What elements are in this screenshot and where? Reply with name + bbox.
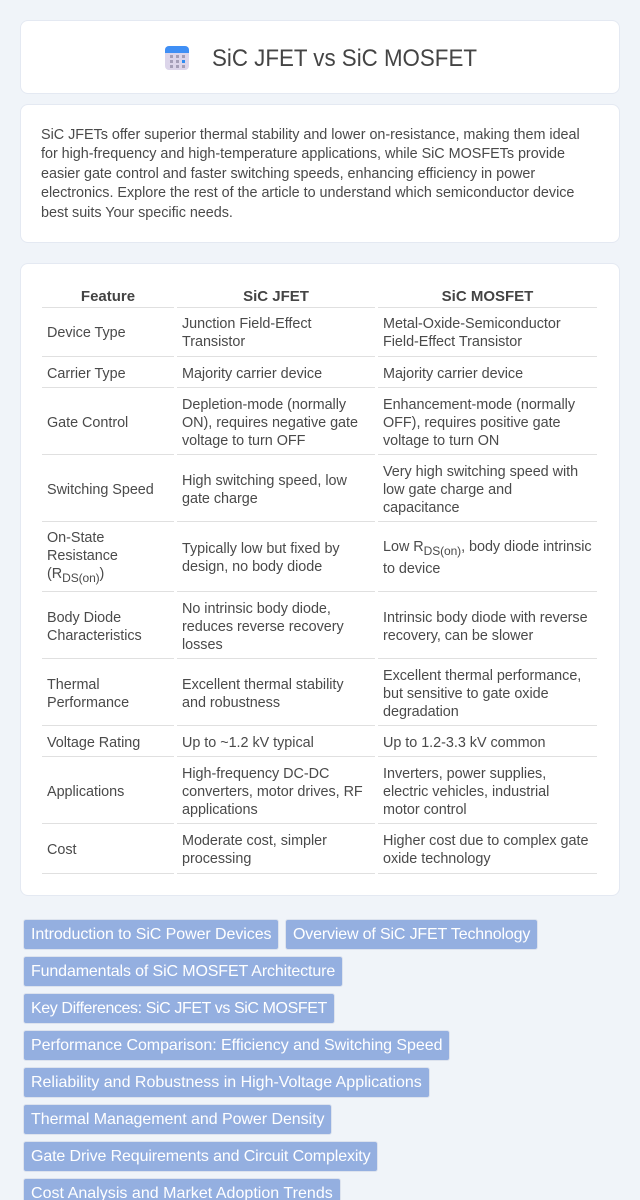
table row: thermal performance: degradation <box>383 704 459 720</box>
tag: gate drive <box>23 1141 378 1172</box>
table row: thermal performance: Excellent thermal performance, <box>383 668 581 684</box>
table row: cost <box>42 833 597 874</box>
table row: body diode characteristics: losses <box>182 636 223 652</box>
table row: on-state resistance: Typically low but fixed by <box>182 541 340 557</box>
table row: on-state resistance: to device <box>383 561 440 577</box>
table row: body diode characteristics <box>42 600 597 659</box>
tag: thermal management: Thermal Management and Power Density <box>31 1111 324 1128</box>
table row: switching speed: gate charge <box>182 490 258 506</box>
table row: cost: Moderate cost, simpler <box>182 833 327 849</box>
text block: introduction: SiC JFETs offer superior thermal stability and lower on-resistance, making them ideal <box>41 127 580 143</box>
text block: introduction: easier gate control and faster switching speeds, enhancing efficiency in power <box>41 166 535 182</box>
table row: device type: Junction Field-Effect <box>182 316 311 332</box>
table header: Feature <box>81 288 135 305</box>
text block: introduction: electronics. Explore the rest of the article to understand which semiconductor device <box>41 185 574 201</box>
table row: gate control: Enhancement-mode (normally <box>383 396 575 412</box>
table row: body diode characteristics: reduces reverse recovery <box>182 618 344 634</box>
tag: performance comparison <box>23 1030 450 1061</box>
table row: switching speed: Switching Speed <box>47 482 154 498</box>
table row: applications: High-frequency DC-DC <box>182 766 329 782</box>
table row: cost: processing <box>182 851 251 867</box>
table row: on-state resistance: On-State <box>47 530 104 546</box>
table row: thermal performance: Performance <box>47 694 129 710</box>
tag: reliability <box>23 1067 430 1098</box>
tag: reliability: Reliability and Robustness in High-Voltage Applications <box>31 1074 422 1091</box>
table row: on-state resistance: (RDS(on)) <box>47 566 104 585</box>
table row: voltage rating: Voltage Rating <box>47 734 140 750</box>
table row: gate control: Gate Control <box>47 414 128 430</box>
tag: thermal management <box>23 1104 332 1135</box>
text block: introduction: for high-frequency and high-temperature applications, while SiC MOSFETs provide <box>41 146 565 162</box>
table row: gate control <box>42 396 597 455</box>
table row: thermal performance: Excellent thermal stability <box>182 676 344 692</box>
table row: thermal performance: Thermal <box>47 676 100 692</box>
panel: comparison table card <box>20 263 620 896</box>
table row: body diode characteristics: Characteristics <box>47 628 142 644</box>
table row: device type <box>42 316 597 357</box>
table row: voltage rating: Up to 1.2-3.3 kV common <box>383 734 545 750</box>
table row: body diode characteristics: No intrinsic body diode, <box>182 600 331 616</box>
table row: gate control: ON), requires negative gate <box>182 414 358 430</box>
table row: applications: electric vehicles, industrial <box>383 784 549 800</box>
table header: SiC JFET <box>243 288 309 305</box>
table row: body diode characteristics: recovery, can be slower <box>383 628 533 644</box>
title: SiC JFET vs SiC MOSFET <box>212 45 477 72</box>
tag: introduction: Introduction to SiC Power Devices <box>31 926 271 943</box>
table row: applications: converters, motor drives, RF <box>182 784 363 800</box>
table row: on-state resistance: Low RDS(on), body diode intrinsic <box>383 539 592 558</box>
table row: gate control: OFF), requires positive gate <box>383 414 561 430</box>
tag: gate drive: Gate Drive Requirements and Circuit Complexity <box>31 1148 370 1165</box>
tag: key differences: Key Differences: SiC JFET vs SiC MOSFET <box>31 1000 327 1017</box>
table row: carrier type <box>42 366 597 388</box>
table row: cost: oxide technology <box>383 851 491 867</box>
tag: SiC MOSFET fundamentals: Fundamentals of SiC MOSFET Architecture <box>31 963 335 980</box>
table row: thermal performance: but sensitive to gate oxide <box>383 686 549 702</box>
table row: gate control: voltage to turn ON <box>383 432 499 448</box>
table row: carrier type: Carrier Type <box>47 366 126 382</box>
table row: on-state resistance: design, no body diode <box>182 559 322 575</box>
table row: cost: Cost <box>47 842 76 858</box>
table row: switching speed: capacitance <box>383 500 459 516</box>
table row: device type: Metal-Oxide-Semiconductor <box>383 316 561 332</box>
table row: on-state resistance: Resistance <box>47 548 118 564</box>
text block: introduction: best suits Your specific needs. <box>41 205 233 221</box>
table row: device type: Transistor <box>182 334 245 350</box>
tag: introduction <box>23 919 279 950</box>
table row: gate control: voltage to turn OFF <box>182 432 305 448</box>
tag: key differences <box>23 993 335 1024</box>
table row: body diode characteristics: Body Diode <box>47 610 121 626</box>
table row: switching speed: low gate charge and <box>383 482 512 498</box>
tag: SiC JFET overview <box>285 919 538 950</box>
table row: applications: Inverters, power supplies, <box>383 766 546 782</box>
text block: introduction <box>41 127 580 221</box>
tag: SiC MOSFET fundamentals <box>23 956 343 987</box>
table row: carrier type: Majority carrier device <box>383 366 523 382</box>
panel: title card <box>20 20 620 94</box>
icon: calendar grid <box>165 46 189 70</box>
table row: voltage rating: Up to ~1.2 kV typical <box>182 734 314 750</box>
table header <box>42 288 597 308</box>
table row: applications: motor control <box>383 802 467 818</box>
table row: thermal performance <box>42 668 597 726</box>
tag: performance comparison: Performance Comparison: Efficiency and Switching Speed <box>31 1037 442 1054</box>
table row: cost: Higher cost due to complex gate <box>383 833 588 849</box>
table row: switching speed: Very high switching speed with <box>383 464 578 480</box>
tag: cost analysis <box>23 1178 341 1200</box>
table row: carrier type: Majority carrier device <box>182 366 322 382</box>
table row: switching speed: High switching speed, low <box>182 472 347 488</box>
table row: voltage rating <box>42 734 597 757</box>
table row: device type: Field-Effect Transistor <box>383 334 522 350</box>
table row: device type: Device Type <box>47 325 126 341</box>
table row: on-state resistance <box>42 530 597 592</box>
table row: applications: Applications <box>47 784 124 800</box>
table row: thermal performance: and robustness <box>182 694 280 710</box>
table header: SiC MOSFET <box>442 288 533 305</box>
table row: body diode characteristics: Intrinsic body diode with reverse <box>383 610 588 626</box>
table row: applications: applications <box>182 802 258 818</box>
table row: gate control: Depletion-mode (normally <box>182 396 346 412</box>
table row: applications <box>42 766 597 824</box>
table row: switching speed <box>42 464 597 522</box>
tag: SiC JFET overview: Overview of SiC JFET Technology <box>293 926 530 943</box>
panel: introduction card <box>20 104 620 243</box>
